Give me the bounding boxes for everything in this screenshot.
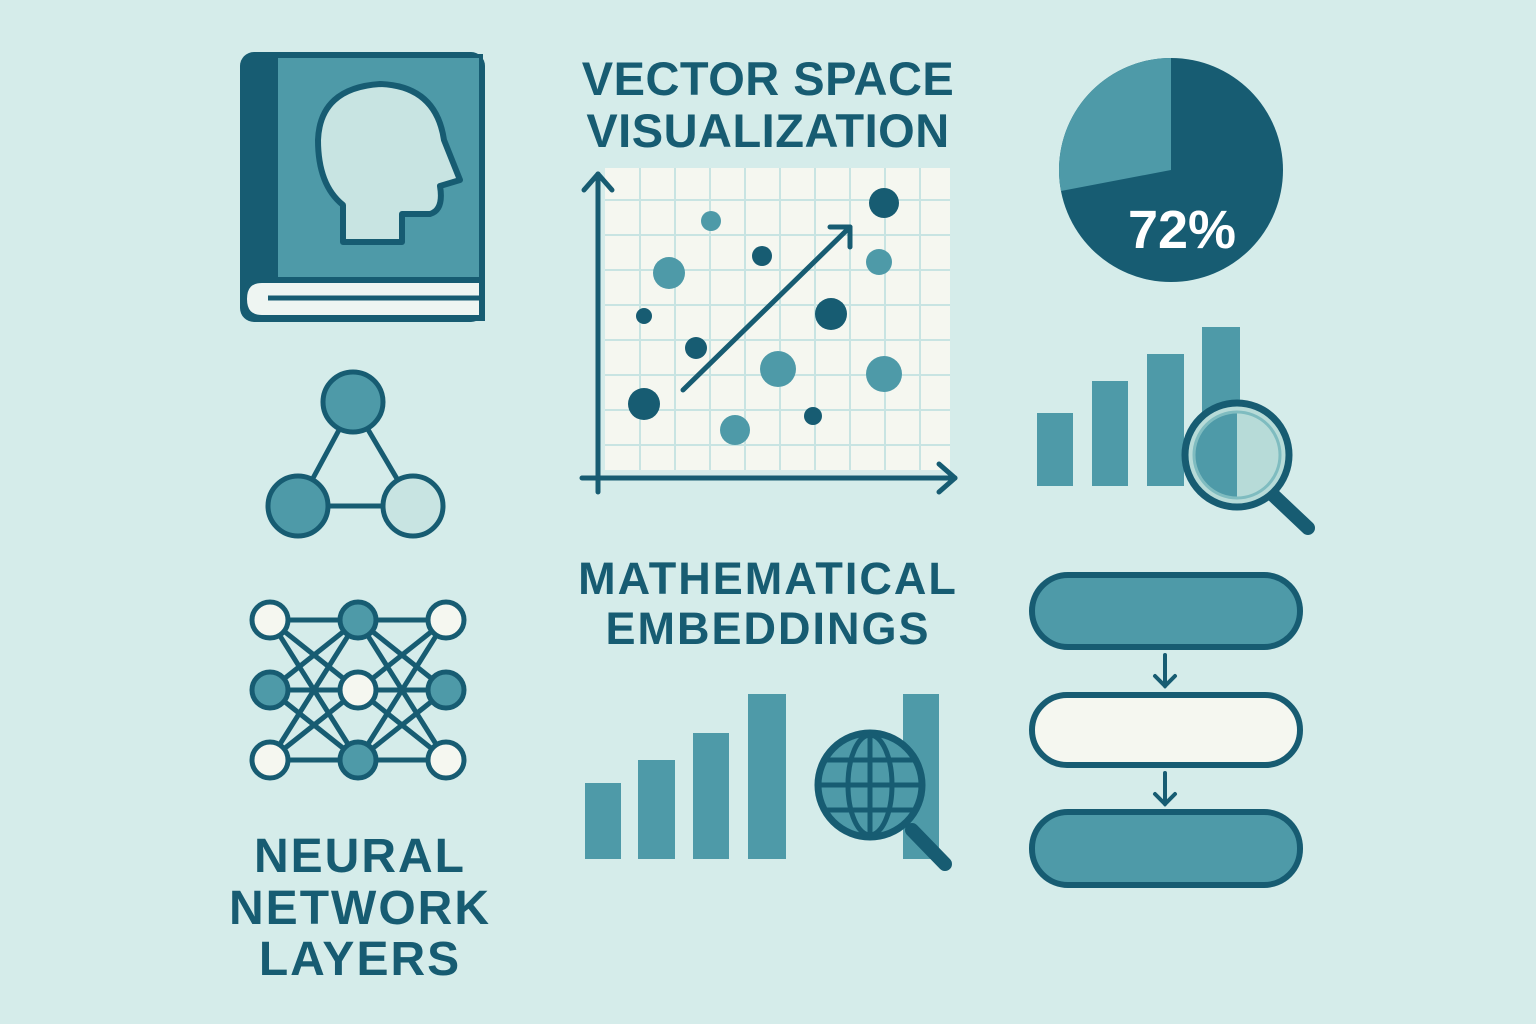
icon: triangle network [268, 372, 443, 536]
heading: neural network layers: NETWORK [229, 882, 491, 935]
icon: neural network [252, 602, 464, 778]
chart: bars with globe magnifier [585, 694, 945, 864]
heading: neural network layers: LAYERS [259, 933, 461, 986]
diagram: flow pills [1032, 575, 1300, 885]
title: vector space visualization [582, 52, 954, 157]
heading: mathematical embeddings [578, 553, 958, 654]
chart: bars with magnifier [1037, 327, 1308, 528]
heading: neural network layers [229, 830, 491, 986]
heading: mathematical embeddings: EMBEDDINGS [605, 603, 931, 654]
chart: pie 72% [1059, 58, 1283, 282]
icon: book with head [240, 52, 485, 322]
heading: mathematical embeddings: MATHEMATICAL [578, 553, 958, 604]
title: vector space visualization: VECTOR SPACE [582, 52, 954, 105]
chart: scatter plot [582, 168, 955, 492]
heading: neural network layers: NEURAL [254, 830, 466, 883]
chart: pie 72%: 72% [1128, 200, 1236, 260]
title: vector space visualization: VISUALIZATION [586, 104, 950, 157]
